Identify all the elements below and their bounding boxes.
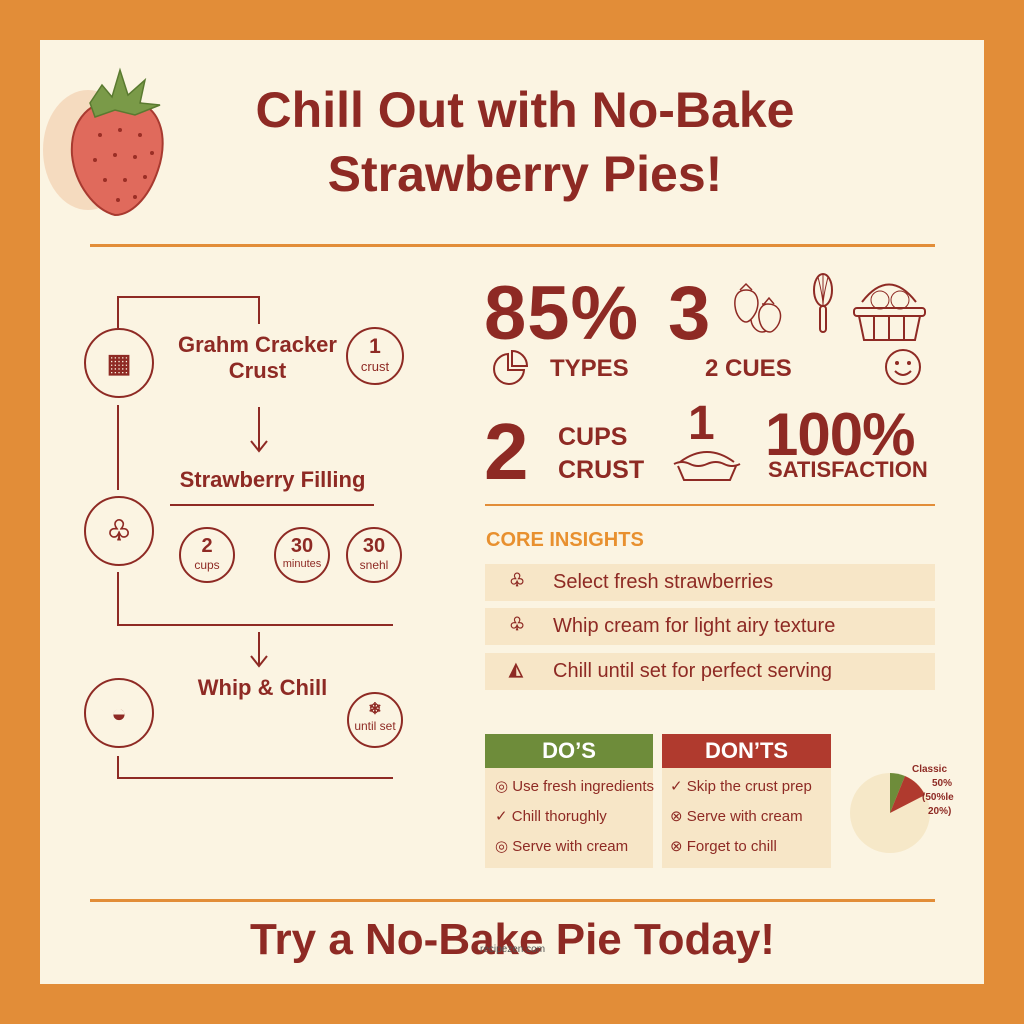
step icon circles: ▦ bbox=[107, 348, 131, 378]
text: 2 bbox=[201, 535, 213, 557]
footer call to action: Try a No-Bake Pie Today! bbox=[250, 915, 775, 964]
text: crust bbox=[361, 359, 389, 374]
text: CUPS bbox=[558, 423, 627, 451]
don'ts panel bbox=[662, 734, 831, 868]
don'ts panel: ⊗ Serve with cream bbox=[670, 808, 803, 825]
icon: pie bbox=[674, 451, 740, 481]
icon: pie chart bbox=[493, 350, 528, 385]
text: ◒ bbox=[111, 698, 127, 728]
text: 3 bbox=[668, 271, 710, 356]
do's panel bbox=[485, 734, 653, 868]
text: ♧ bbox=[509, 614, 525, 634]
text: ♧ bbox=[106, 515, 132, 546]
text: cups bbox=[194, 558, 220, 572]
step 2 title: Strawberry Filling bbox=[180, 467, 365, 492]
don'ts panel: ✓ Skip the crust prep bbox=[670, 778, 812, 795]
do's panel: DO’S bbox=[542, 738, 596, 763]
step 3 title: Whip & Chill bbox=[198, 675, 327, 700]
step 1 title bbox=[178, 332, 337, 383]
pie chart: 20%) bbox=[928, 806, 951, 817]
insight rows bbox=[485, 564, 935, 601]
pie chart bbox=[850, 764, 954, 853]
flow diagram bbox=[84, 296, 404, 779]
pie chart: Classic bbox=[912, 764, 947, 775]
don'ts panel: DON’TS bbox=[705, 738, 788, 763]
do's panel: ✓ Chill thorughly bbox=[495, 808, 607, 825]
text: 100% bbox=[765, 401, 914, 468]
text: minutes bbox=[283, 558, 321, 570]
icons: strawberries, whisk, basket bbox=[734, 283, 782, 333]
title: Strawberry Pies! bbox=[328, 146, 722, 202]
do's panel: ◎ Serve with cream bbox=[495, 838, 628, 855]
do's panel: ◎ Use fresh ingredients bbox=[495, 778, 654, 795]
insight rows: ♧ bbox=[509, 570, 525, 590]
step icon circles bbox=[84, 328, 154, 398]
icon: strawberry decoration bbox=[43, 68, 164, 216]
step 1 title: Crust bbox=[229, 358, 286, 383]
text: TYPES bbox=[550, 355, 629, 382]
stats grid bbox=[484, 271, 928, 496]
text: 30 bbox=[363, 535, 385, 557]
text: 1 bbox=[688, 397, 715, 450]
text: 1 bbox=[369, 335, 381, 358]
arrow bbox=[250, 407, 268, 452]
text: Chill until set for perfect serving bbox=[553, 660, 832, 682]
title bbox=[256, 82, 794, 202]
text: snehl bbox=[360, 558, 388, 572]
core insights heading: CORE INSIGHTS bbox=[486, 529, 644, 551]
title: Chill Out with No-Bake bbox=[256, 82, 794, 138]
text: recipezen.com bbox=[480, 944, 545, 955]
text: CRUST bbox=[558, 456, 644, 484]
icon: smiley bbox=[885, 349, 921, 385]
pie chart: (50%le bbox=[922, 792, 954, 803]
don'ts panel: ⊗ Forget to chill bbox=[670, 838, 777, 855]
text: until set bbox=[354, 719, 396, 733]
text: 30 bbox=[291, 535, 313, 557]
text: Whip cream for light airy texture bbox=[553, 615, 835, 637]
text: 85% bbox=[484, 271, 639, 356]
text: 2 CUES bbox=[705, 355, 792, 382]
insight rows: Select fresh strawberries bbox=[553, 571, 773, 593]
text: SATISFACTION bbox=[768, 457, 928, 482]
text: 2 bbox=[484, 407, 528, 496]
pie chart: 50% bbox=[932, 778, 952, 789]
step 1 title: Grahm Cracker bbox=[178, 332, 337, 357]
text: ◭ bbox=[509, 659, 523, 679]
text: ❄ bbox=[368, 701, 382, 718]
